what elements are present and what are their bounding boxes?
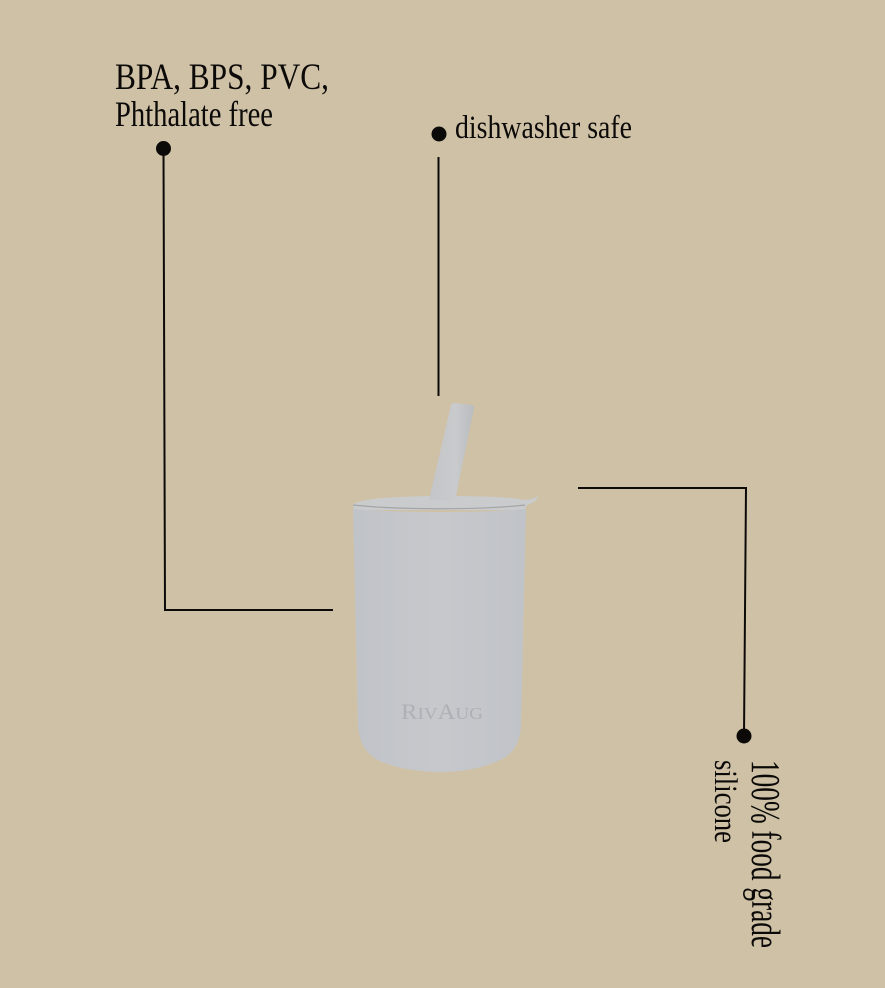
lid seam: [353, 505, 525, 509]
callout: dishwasher safe: [432, 110, 632, 396]
rotated text: 100% food grade silicone: silicone: [707, 760, 743, 843]
lid: [353, 496, 538, 510]
rotated text: 100% food grade silicone: [707, 760, 789, 948]
callout dot: [432, 126, 446, 142]
callout: food grade silicone: [578, 488, 789, 948]
callout text: BPA, BPS, PVC, Phthalate free: BPA, BPS, PVC,: [115, 57, 329, 98]
callout: BPA free: [115, 57, 333, 610]
brand text on cup: RIVAUG: [401, 699, 483, 724]
leader line to cup: [164, 150, 333, 610]
callout dot: [156, 141, 171, 156]
callout dot: [736, 728, 752, 744]
callout text: BPA, BPS, PVC, Phthalate free: Phthalate free: [115, 94, 273, 134]
cup body: [353, 509, 526, 772]
callout text: BPA, BPS, PVC, Phthalate free: [115, 57, 329, 134]
product: silicone cup with straw: [353, 403, 538, 772]
leader line to straw: [438, 157, 440, 396]
leader line from cup: [578, 488, 746, 736]
straw: [429, 403, 474, 501]
callout text: dishwasher safe: dishwasher safe: [455, 110, 632, 146]
